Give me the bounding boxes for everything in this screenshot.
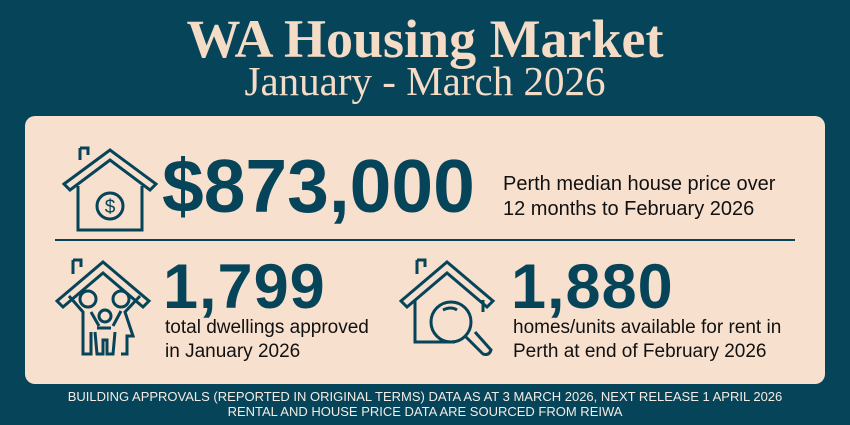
stat: rentals: 1,880: [511, 252, 674, 322]
text: approvals desc: [165, 317, 369, 362]
icon: family house: [55, 258, 152, 356]
text: median price desc: [503, 173, 776, 220]
icon: house with dollar: $: [105, 197, 116, 218]
text: approvals desc: in January 2026: [165, 341, 300, 362]
footer notes: [68, 389, 782, 419]
text: rentals desc: Perth at end of February 2026: [513, 341, 766, 362]
panel: stats: [25, 116, 825, 384]
stat: median price: $873,000: [162, 144, 475, 228]
footer notes: RENTAL AND HOUSE PRICE DATA ARE SOURCED FROM REIWA: [228, 404, 622, 419]
subtitle: January - March 2026: [245, 58, 605, 104]
icon: house magnifier: [399, 258, 496, 356]
icon: house with dollar: [62, 146, 158, 232]
stat: approvals: 1,799: [163, 252, 326, 322]
text: approvals desc: total dwellings approved: [165, 317, 369, 338]
text: median price desc: Perth median house price over: [503, 173, 775, 195]
title: WA Housing Market: [186, 9, 664, 69]
footer notes: BUILDING APPROVALS (REPORTED IN ORIGINAL TERMS) DATA AS AT 3 MARCH 2026, NEXT RELEASE 1 APRIL 2026: [68, 389, 782, 404]
divider: [55, 239, 795, 241]
text: rentals desc: homes/units available for rent in: [513, 317, 781, 338]
text: rentals desc: [513, 317, 781, 362]
text: median price desc: 12 months to February 2026: [503, 198, 754, 220]
